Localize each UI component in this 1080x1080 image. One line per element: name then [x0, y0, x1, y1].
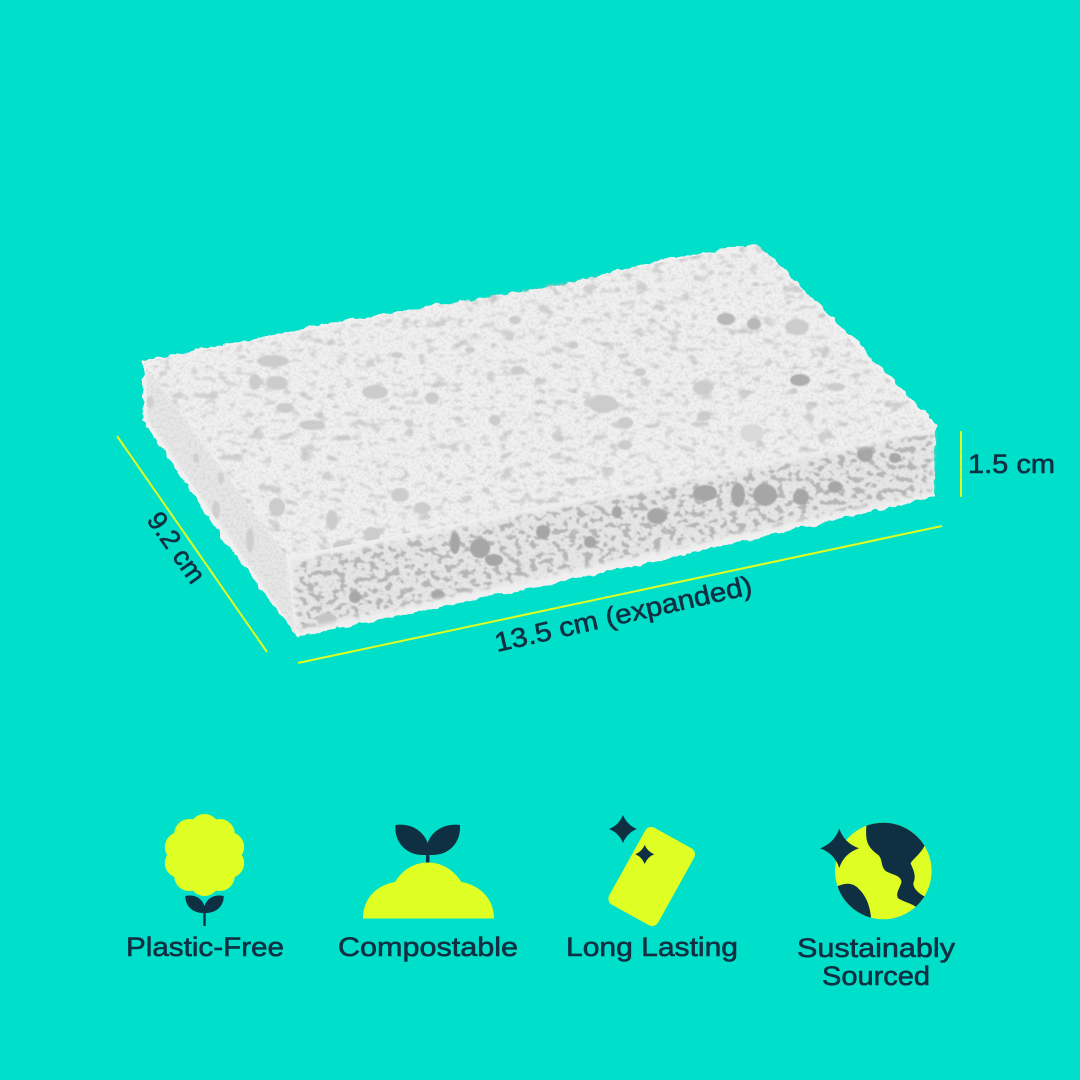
- label: 9.2 cm: 9.2 cm: [141, 506, 212, 589]
- icon: sponge with sparkles: [606, 815, 698, 929]
- label: Sustainably Sourced: [797, 933, 956, 991]
- dimension line: height: [960, 431, 962, 497]
- feature: plastic-free: [126, 814, 284, 962]
- label: 1.5 cm: 1.5 cm: [968, 449, 1055, 479]
- icon: sprout on soil: [363, 825, 494, 918]
- icon: globe with sparkle: [820, 817, 932, 920]
- top face pore texture: [144, 244, 936, 556]
- feature: long lasting: [566, 815, 738, 962]
- label: 13.5 cm (expanded): 13.5 cm (expanded): [492, 570, 755, 658]
- label: Sustainably Sourced: Sourced: [822, 961, 930, 991]
- left side face: [146, 368, 295, 632]
- label: Plastic-Free: Plastic-Free: [126, 932, 284, 962]
- label: Compostable: Compostable: [338, 932, 518, 962]
- icon: flower: [165, 814, 244, 926]
- label: Long Lasting: Long Lasting: [566, 932, 738, 962]
- front face pores: [292, 430, 938, 632]
- sponge product illustration: [142, 244, 938, 638]
- label: Sustainably Sourced: Sustainably: [797, 933, 956, 963]
- feature: compostable: [338, 825, 518, 962]
- feature: sustainably sourced: [797, 817, 956, 991]
- dimension line: width: [117, 436, 267, 652]
- dimension line: length: [298, 526, 942, 663]
- sponge silhouette: [143, 244, 936, 637]
